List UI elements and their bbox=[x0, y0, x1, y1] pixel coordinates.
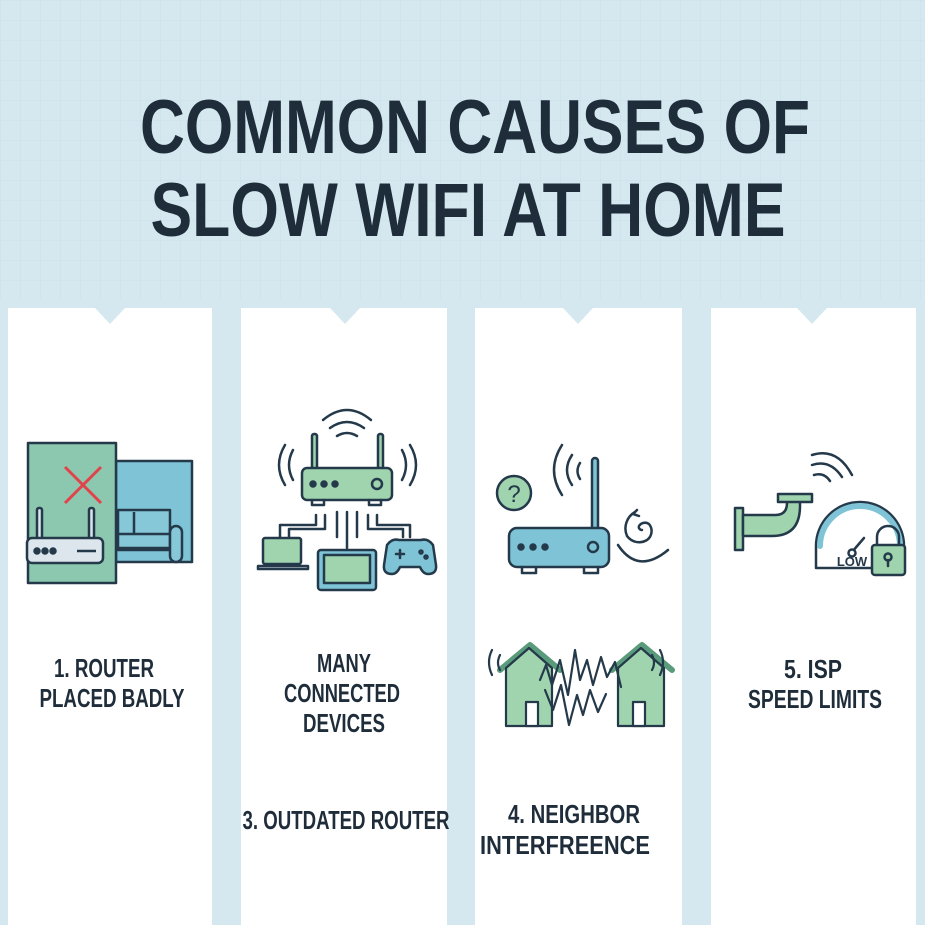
icon: houses with interference bbox=[489, 645, 672, 726]
label 5: SPEED LIMITS bbox=[748, 684, 882, 714]
label 2 bbox=[284, 648, 400, 738]
label 5 bbox=[748, 654, 882, 714]
icon: router behind wall bbox=[27, 443, 192, 583]
label 5: 5. ISP bbox=[784, 654, 842, 684]
icon: outdated router bbox=[497, 445, 668, 573]
title: SLOW WIFI AT HOME bbox=[150, 168, 786, 253]
panel: ISP speed limits bbox=[711, 308, 916, 925]
label 2: MANY bbox=[317, 648, 371, 678]
icon: router with devices bbox=[258, 410, 436, 590]
icon: outdated router: ? bbox=[507, 481, 521, 508]
label 4: 4. NEIGHBOR bbox=[508, 799, 640, 829]
label 4: INTERFREENCE bbox=[480, 830, 650, 860]
label 3: 3. OUTDATED ROUTER bbox=[242, 805, 450, 835]
label 2: DEVICES bbox=[303, 708, 385, 738]
panel: neighbor interference bbox=[475, 308, 682, 925]
icon: pipe gauge lock: LOW bbox=[837, 554, 868, 569]
label 1: PLACED BADLY bbox=[40, 683, 184, 713]
label 1 bbox=[40, 653, 184, 713]
title bbox=[140, 85, 810, 253]
label 4 bbox=[480, 799, 650, 860]
panel: many devices / outdated router bbox=[241, 308, 450, 925]
panel: router placed badly bbox=[8, 308, 212, 925]
label 1: 1. ROUTER bbox=[54, 653, 154, 683]
label 2: CONNECTED bbox=[284, 678, 400, 708]
icon: pipe gauge lock bbox=[735, 453, 905, 575]
